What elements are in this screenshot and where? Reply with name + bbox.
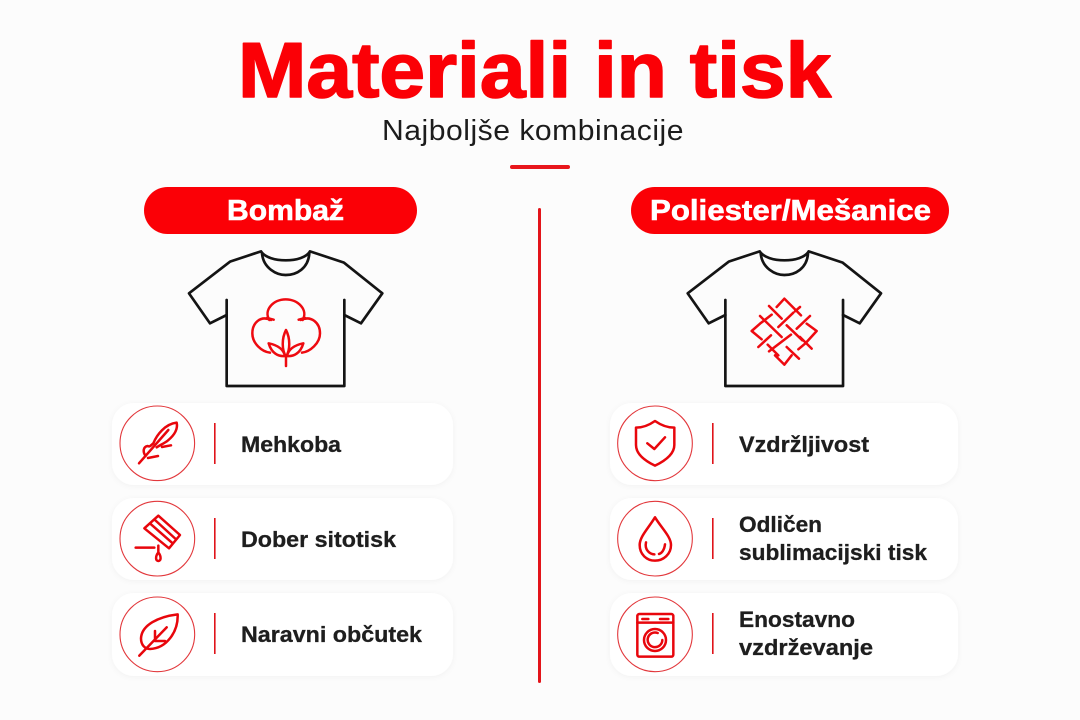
icon: leaf xyxy=(120,597,195,672)
card: Odličen sublimacijski tisk: Odličen xyxy=(739,512,822,537)
card: Odličen sublimacijski tisk: sublimacijski tisk xyxy=(739,540,928,565)
t-shirt with cotton icon xyxy=(189,251,382,386)
icon: ink drop xyxy=(618,501,692,576)
panel: Bombaž column xyxy=(112,187,453,676)
t-shirt with woven fabric icon xyxy=(688,251,881,386)
card: Enostavno vzdrževanje: vzdrževanje xyxy=(739,635,873,660)
icon: feather xyxy=(120,406,195,481)
subtitle: Najboljše kombinacije xyxy=(382,115,684,147)
card: Enostavno vzdrževanje xyxy=(610,593,958,676)
card: Naravni občutek: Naravni občutek xyxy=(241,622,423,647)
panel: Poliester/Mešanice column xyxy=(610,187,958,676)
card: Odličen sublimacijski tisk xyxy=(610,498,958,580)
card: Mehkoba: Mehkoba xyxy=(241,432,342,457)
heading pill: Bombaž: Bombaž xyxy=(227,195,344,227)
center vertical divider xyxy=(538,208,541,683)
heading pill: Bombaž xyxy=(144,187,417,234)
icon: squeegee xyxy=(120,501,195,576)
card: Naravni občutek xyxy=(112,593,453,676)
title: Materiali in tisk xyxy=(238,26,832,114)
card: Mehkoba xyxy=(112,403,453,485)
heading pill: Poliester/Mešanice xyxy=(631,187,949,234)
heading pill: Poliester/Mešanice: Poliester/Mešanice xyxy=(650,195,931,227)
title underline accent xyxy=(510,165,570,169)
card: Enostavno vzdrževanje: Enostavno xyxy=(739,607,855,632)
icon: washing machine xyxy=(618,597,692,672)
card: Vzdržljivost xyxy=(610,403,958,485)
icon: shield xyxy=(618,406,692,481)
card: Vzdržljivost: Vzdržljivost xyxy=(739,432,870,457)
card: Dober sitotisk: Dober sitotisk xyxy=(241,527,397,552)
card: Dober sitotisk xyxy=(112,498,453,580)
